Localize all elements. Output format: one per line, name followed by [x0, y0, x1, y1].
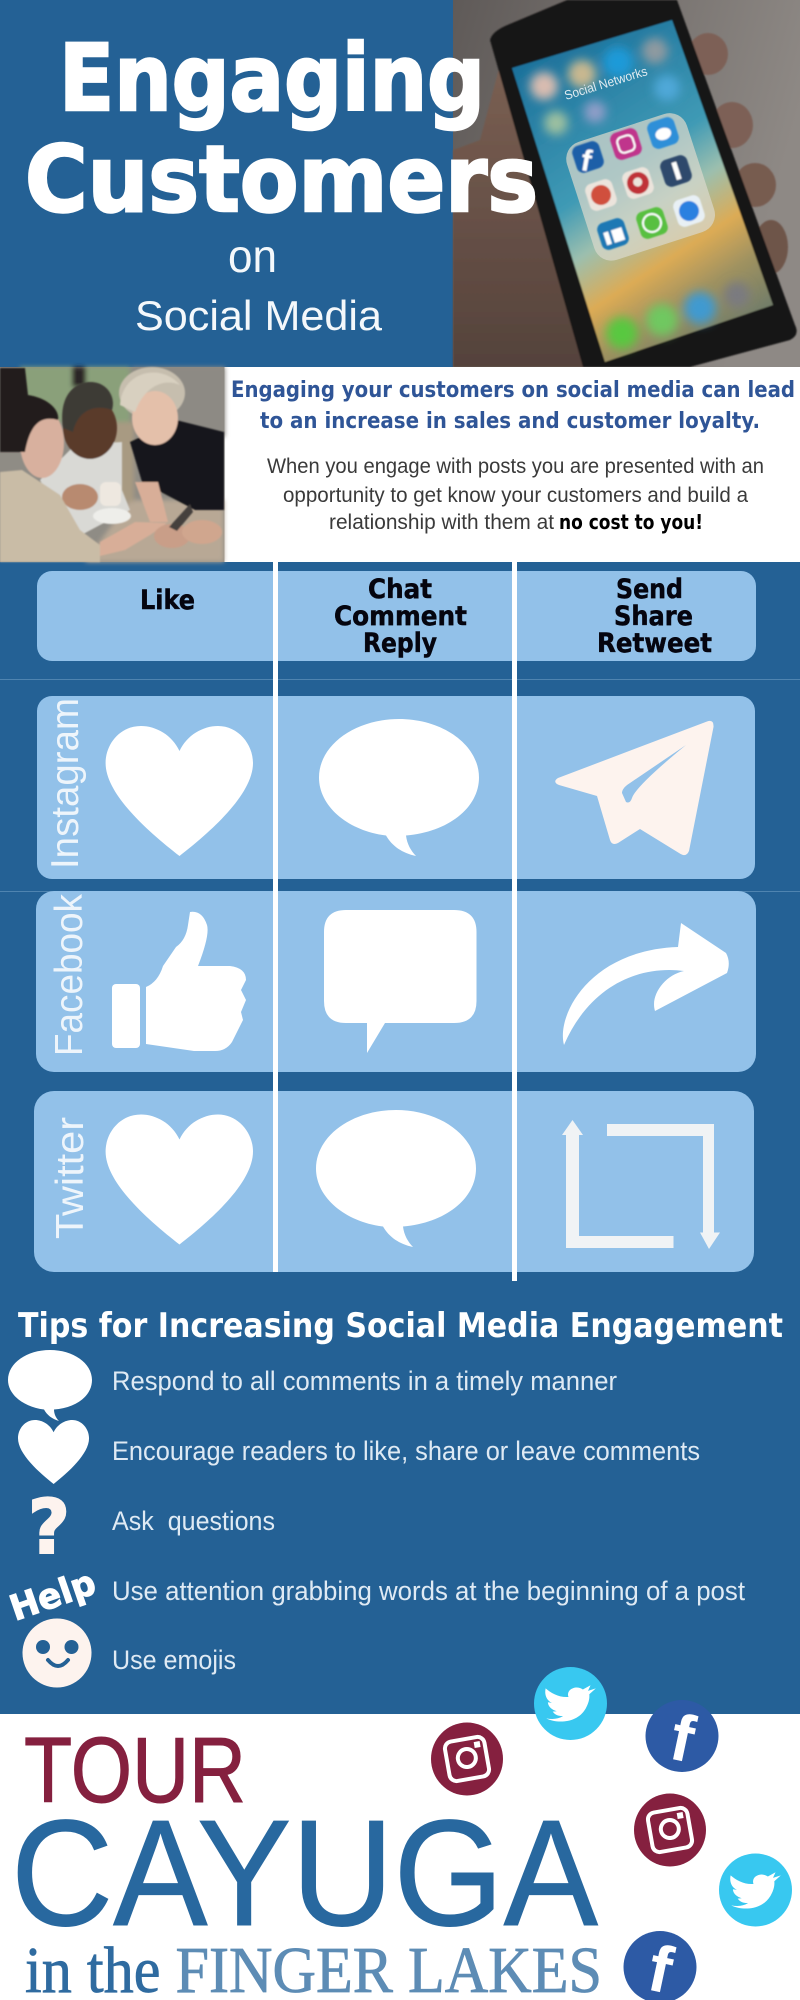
column heading: send share retweet: Send [616, 574, 683, 605]
icon: facebook comment bubble [324, 910, 476, 1053]
icon: twitter badge right [719, 1854, 792, 1926]
folder of social apps [562, 108, 720, 265]
title line 2: Customers [25, 126, 538, 233]
tip text: Use attention grabbing words at the beginning of a post [112, 1576, 745, 1606]
icon: facebook badge bottom [624, 1930, 696, 2000]
woman with blond hair, black tee [130, 420, 224, 510]
column heading: send share retweet [597, 574, 712, 659]
tip 5 [22, 1618, 236, 1688]
photo: hand holding phone [453, 0, 800, 367]
icon: thumbs up [112, 912, 246, 1051]
logo word tour: TOUR [24, 1718, 246, 1822]
title [25, 25, 538, 339]
intro body text [267, 455, 764, 534]
woman in white shirt [40, 442, 130, 540]
app icons: f [578, 144, 595, 179]
app icons [570, 115, 707, 252]
icon: instagram like heart [106, 726, 253, 856]
subtitle social media: Social Media [135, 292, 383, 339]
pointing arm and hands [100, 522, 167, 556]
phone body [490, 0, 797, 367]
logo: tour cayuga in the finger lakes [11, 1718, 602, 2000]
icon: twitter badge top [534, 1667, 607, 1740]
icon: paper plane [555, 721, 714, 855]
column heading: send share retweet: Retweet [597, 628, 712, 659]
tip text: Respond to all comments in a timely manner [112, 1366, 617, 1396]
icon: question mark: ? [28, 1483, 70, 1571]
icon: facebook badge top [646, 1699, 718, 1776]
icon: facebook badge top: f [664, 1699, 702, 1776]
hand palm [453, 65, 590, 367]
phone screen [512, 20, 773, 362]
intro body text: relationship with them at [329, 511, 554, 534]
icon: speech bubble [8, 1350, 92, 1421]
photo: group looking at phone [0, 367, 225, 562]
header row panel [37, 571, 756, 661]
row label: twitter: Twitter [49, 1117, 92, 1239]
tip text: Ask questions [112, 1506, 275, 1536]
text on phone screen: Social Networks [562, 63, 650, 103]
intro body text: When you engage with posts you are presented with an [267, 455, 764, 478]
tip 4 [5, 1563, 745, 1630]
panel: facebook row [36, 891, 756, 1072]
chair [112, 422, 134, 502]
column heading: chat comment reply: Chat [368, 574, 432, 605]
icon: smiley face [22, 1618, 92, 1688]
faint row lines [0, 679, 800, 680]
intro body text: no cost to you! [559, 510, 703, 534]
woman with dark hair in bun [0, 470, 100, 562]
tip 3 [28, 1483, 275, 1571]
icon: instagram comment bubble [319, 719, 479, 856]
intro panel [224, 367, 800, 562]
tip text: Encourage readers to like, share or leave comments [112, 1436, 700, 1466]
blurred home screen apps [530, 38, 750, 349]
cup and saucer [93, 508, 131, 524]
row label: facebook: Facebook [48, 894, 91, 1056]
tip text: Use emojis [112, 1645, 236, 1675]
panel: twitter row [34, 1091, 754, 1272]
icon: instagram badge right [634, 1794, 706, 1866]
row label: instagram: Instagram [44, 698, 87, 869]
column heading: like: Like [140, 585, 195, 616]
logo word cayuga: CAYUGA [11, 1788, 598, 1957]
icon: help word: Help [5, 1563, 101, 1630]
column heading: chat comment reply [334, 574, 467, 659]
column divider 2 [512, 562, 517, 1281]
column heading: chat comment reply: Reply [363, 628, 437, 659]
tip 1 [8, 1350, 617, 1421]
panel: instagram row [37, 696, 755, 879]
icon: heart [18, 1420, 89, 1484]
subtitle on: on [228, 230, 277, 282]
phone in hand [169, 504, 193, 531]
column heading: send share retweet: Share [614, 601, 693, 632]
column heading: chat comment reply: Comment [334, 601, 467, 632]
intro body text: opportunity to get know your customers and build a [283, 484, 748, 507]
icon: instagram badge left [431, 1722, 503, 1796]
icon: twitter comment bubble [316, 1110, 476, 1247]
table [85, 500, 224, 562]
icon: retweet arrows [562, 1120, 720, 1249]
tip 2 [18, 1420, 700, 1484]
intro heading [231, 377, 795, 434]
title line 1: Engaging [59, 25, 485, 132]
icon: share arrow [563, 923, 729, 1045]
column divider 1 [273, 562, 278, 1272]
icon: twitter like heart [106, 1114, 253, 1244]
